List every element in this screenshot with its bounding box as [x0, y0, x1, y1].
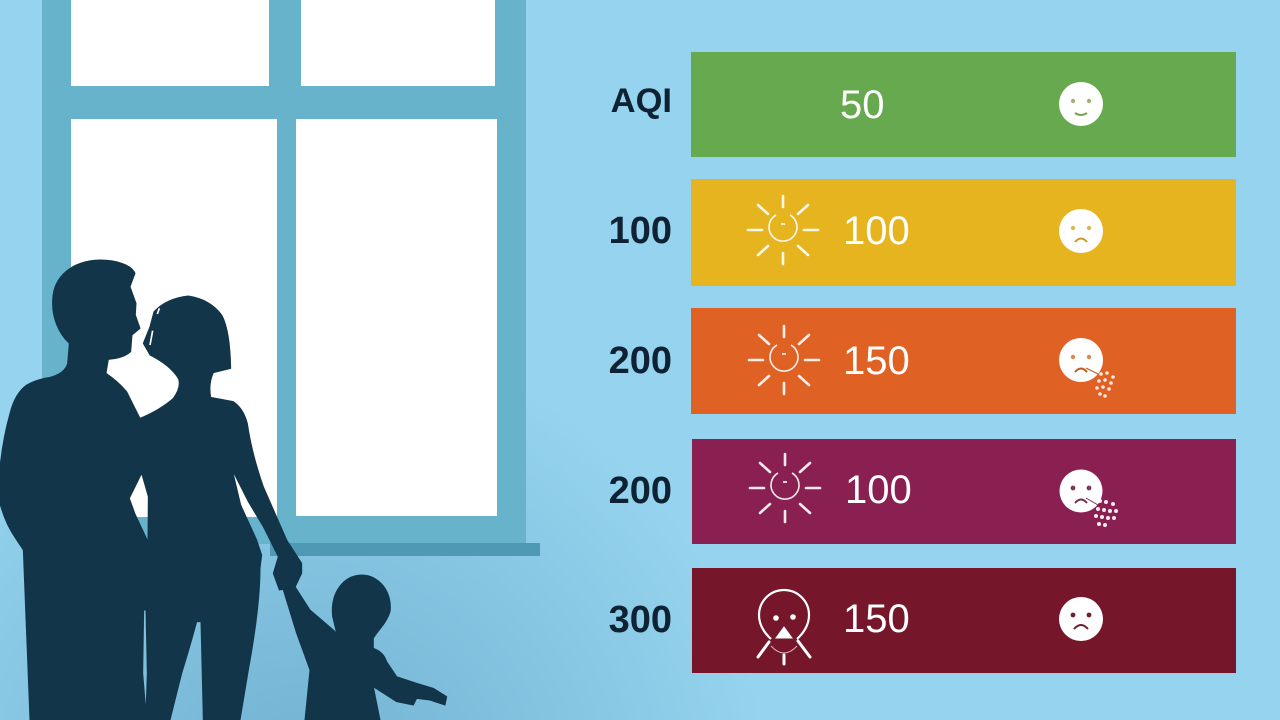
woman hair detail: [145, 308, 159, 359]
icon: sad face: [1059, 209, 1103, 253]
floor shading: [0, 330, 780, 720]
family silhouette: [0, 260, 447, 720]
yellow bar: [691, 179, 1236, 286]
value: 150: [843, 597, 910, 641]
icon: sad face with particles: [1059, 338, 1115, 398]
icon: head with throat symptoms: [758, 590, 810, 664]
row label: 100: [609, 210, 672, 252]
icon: sun: [750, 454, 820, 522]
green bar: [691, 52, 1236, 157]
row 2: 100: [609, 179, 1236, 286]
value: 100: [843, 209, 910, 253]
value: 50: [840, 83, 884, 127]
child silhouette: [283, 575, 447, 720]
icon: sad face: [1059, 597, 1103, 641]
value: 150: [843, 339, 910, 383]
row label: 200: [609, 340, 672, 382]
lower left pane: [71, 119, 277, 517]
row label: 200: [609, 470, 672, 512]
window: [42, 0, 540, 556]
icon: sun: [748, 196, 818, 264]
upper left pane: [71, 0, 269, 86]
dark red bar: [692, 568, 1236, 673]
icon: smiling face: [1059, 82, 1103, 126]
row label: AQI: [611, 82, 672, 120]
row 1: AQI 50: [611, 52, 1236, 157]
upper right pane: [301, 0, 495, 86]
row 4: 200: [609, 439, 1236, 544]
icon: sad face with particles: [1060, 470, 1118, 527]
window frame: [42, 0, 526, 544]
row label: 300: [609, 599, 672, 641]
orange bar: [691, 308, 1236, 414]
row 3: 200: [609, 308, 1236, 414]
row 5: 300: [609, 568, 1236, 673]
icon: sun: [749, 326, 819, 394]
window sill: [270, 543, 540, 556]
value: 100: [845, 468, 912, 512]
lower right pane: [296, 119, 497, 516]
purple bar: [692, 439, 1236, 544]
man and woman silhouette: [0, 260, 302, 720]
